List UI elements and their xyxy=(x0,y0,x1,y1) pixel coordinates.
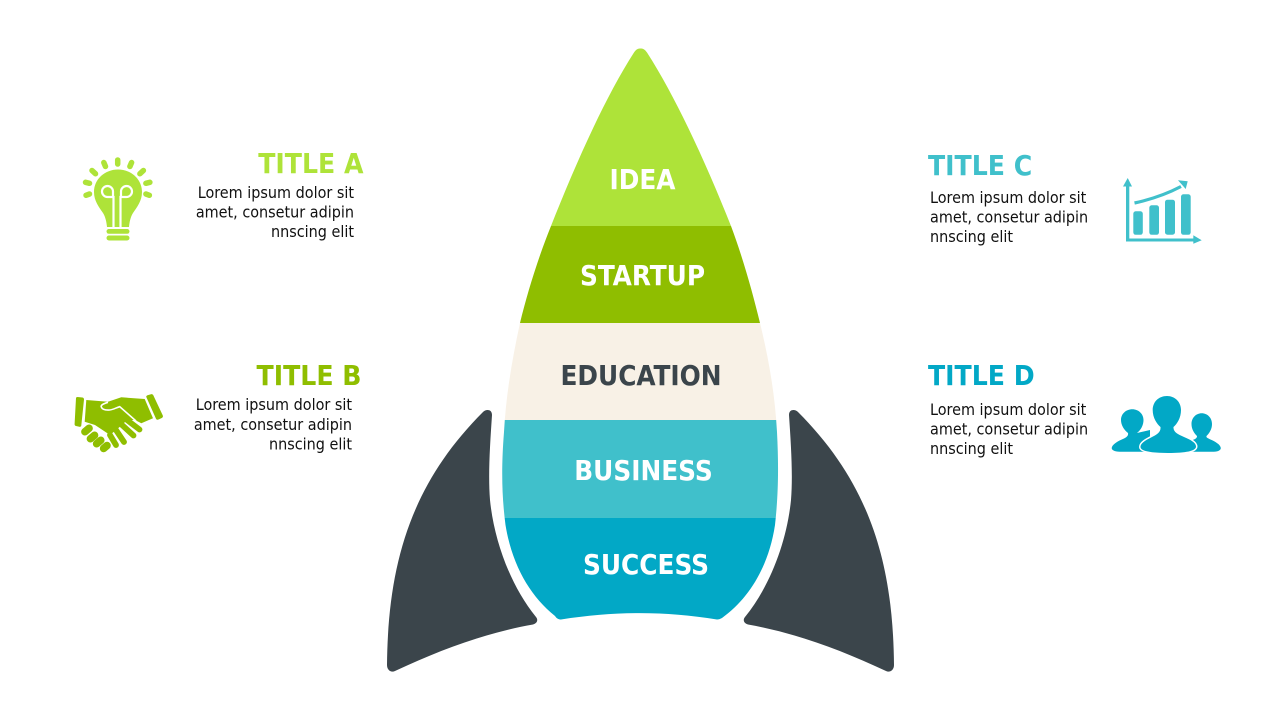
text: title c body: nnscing elit xyxy=(930,227,1013,246)
heading: title d: TITLE D xyxy=(928,359,1035,392)
segment: education xyxy=(490,323,790,420)
text: title a body: Lorem ipsum dolor sit xyxy=(198,183,354,202)
text: title d body: amet, consetur adipin xyxy=(930,420,1088,438)
text: title d body: nnscing elit xyxy=(930,439,1013,458)
block: title a xyxy=(196,147,364,241)
block: title c xyxy=(928,149,1088,246)
label: education: EDUCATION xyxy=(560,359,722,392)
text: title d body: Lorem ipsum dolor sit xyxy=(930,400,1087,419)
left fin xyxy=(387,410,537,672)
fingers xyxy=(110,420,140,445)
segment: success xyxy=(504,518,776,620)
segment: business xyxy=(490,420,790,518)
text: title b body: amet, consetur adipin xyxy=(194,415,352,434)
heading: title a: TITLE A xyxy=(258,147,364,180)
icon: light bulb xyxy=(86,160,150,240)
icon: handshake xyxy=(75,394,163,454)
label: idea: IDEA xyxy=(609,163,676,196)
icon: people xyxy=(1112,396,1221,453)
segment: idea xyxy=(551,48,731,226)
block: title d xyxy=(928,359,1088,458)
segment: startup xyxy=(520,226,760,323)
text: title b body: nnscing elit xyxy=(269,434,352,454)
text: title b body: Lorem ipsum dolor sit xyxy=(196,395,352,414)
label: business: BUSINESS xyxy=(574,454,713,487)
knuckles xyxy=(80,423,112,454)
heading: title c: TITLE C xyxy=(928,149,1032,182)
block: title b xyxy=(194,359,362,454)
text: title c body: amet, consetur adipin xyxy=(930,208,1088,226)
text: title c body: Lorem ipsum dolor sit xyxy=(930,188,1087,207)
label: startup: STARTUP xyxy=(580,259,705,292)
text: title a body: amet, consetur adipin xyxy=(196,202,354,222)
heading: title b: TITLE B xyxy=(257,359,362,392)
palm xyxy=(85,397,153,435)
right fin xyxy=(744,410,894,672)
text: title a body: nnscing elit xyxy=(271,222,354,241)
icon: growth chart xyxy=(1123,178,1202,244)
rocket body xyxy=(502,48,778,620)
label: success: SUCCESS xyxy=(583,548,709,581)
